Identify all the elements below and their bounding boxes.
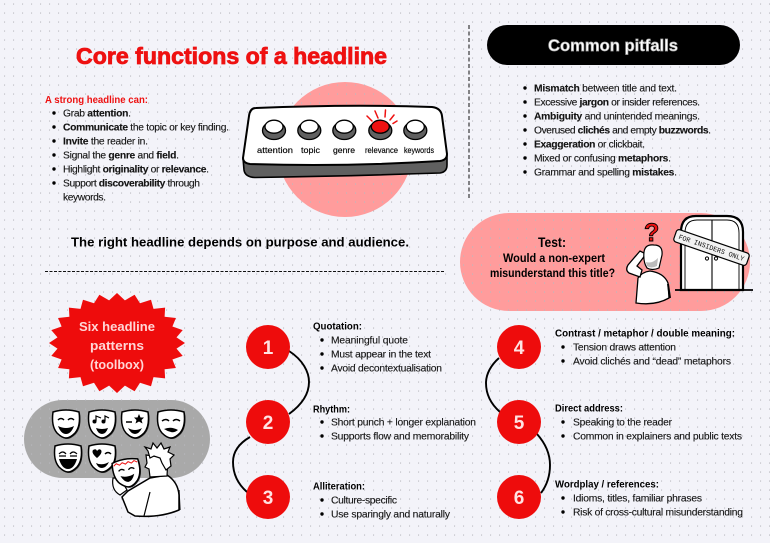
text block: pitfalls list: Excessive jargon or insider references. [534,98,700,108]
test panel background [460,213,750,311]
text block: pitfalls list [523,84,711,178]
pattern 3: alliteration: Use sparingly and naturally [331,510,451,520]
text block: pitfalls list: Mixed or confusing metaphors. [534,154,671,164]
icon: door [675,216,753,290]
pattern 3: alliteration [246,475,451,520]
button: topic: topic [301,145,321,155]
button: genre [333,120,356,155]
illustration: button panel [243,106,447,178]
pattern 2: rhythm [246,400,476,444]
pattern 6: wordplay: Wordplay / references: [555,480,659,490]
icon: held mask [111,457,144,490]
pattern 3: alliteration: Culture-specific [331,496,397,506]
icon: mask 2 notes [88,410,116,439]
pattern 5: direct address: Common in explainers and public texts [573,432,742,442]
icon: mask 5 [54,444,82,473]
callout: test question: Test: [538,235,566,250]
pattern 6: wordplay: Idioms, titles, familiar phrases [573,494,702,504]
connector 2 to 3 [233,437,250,492]
pattern 1: quotation: Must appear in the text [331,350,431,360]
pattern 4: contrast: Avoid clichés and “dead” metaphors [573,356,731,368]
heading: common pitfalls [487,25,740,65]
text block: a strong headline can [45,95,229,204]
pattern 5: direct address [497,400,742,444]
pattern 3: alliteration: Alliteration: [313,482,365,492]
pattern 1: quotation: Meaningful quote [331,336,408,346]
pink circle behind button panel [278,82,412,217]
badge: six headline patterns: (toolbox) [90,357,144,372]
icon: mask 4 [158,410,186,439]
pattern 6: wordplay: Risk of cross-cultural misunderstanding [573,508,743,518]
pattern 5: direct address: 5 [514,413,525,434]
statement: The right headline depends on purpose and audience. [71,234,409,250]
pattern 1: quotation: Quotation: [313,322,362,332]
pattern 1: quotation: Avoid decontextualisation [331,364,442,374]
connector 1 to 2 [289,351,309,414]
title: Core functions of a headline [76,43,387,69]
button: attention: attention [257,145,293,155]
text block: a strong headline can: Grab attention. [63,108,131,120]
badge: six headline patterns: patterns [90,338,144,353]
button: relevance (active) [365,110,398,155]
connector 5 to 6 [537,434,550,493]
text block: pitfalls list: Mismatch between title and text. [534,84,677,94]
connector 4 to 5 [486,358,500,412]
text block: a strong headline can: Communicate the topic or key finding. [63,122,229,134]
heading: common pitfalls: Common pitfalls [548,36,678,55]
text block: a strong headline can: Support discoverability through [63,178,200,190]
icon: mask 3 star [122,410,150,439]
illustration: person at door [627,216,753,304]
icon: thinking person [627,245,670,304]
pattern 4: contrast [497,325,735,369]
icon: mask 6 heart [88,444,116,473]
pattern 1: quotation [246,322,442,374]
pattern 6: wordplay [497,475,743,519]
text block: pitfalls list: Ambiguity and unintended meanings. [534,112,700,122]
text block: pitfalls list: Exaggeration or clickbait. [534,140,645,150]
icon: mask 1 [52,410,80,439]
callout: test question: misunderstand this title? [490,268,615,280]
text block: a strong headline can: A strong headline can: [45,95,148,106]
button: topic [298,120,321,155]
button: keywords [404,120,434,155]
pattern 2: rhythm: Short punch + longer explanation [331,418,476,428]
callout: test question [490,235,615,280]
illustration: man holding mask [111,443,180,516]
pattern 4: contrast: Contrast / metaphor / double meaning: [555,328,735,340]
button: genre: genre [333,145,355,155]
badge: six headline patterns [49,293,185,393]
button: relevance (active): relevance [365,145,398,155]
pattern 5: direct address: Speaking to the reader [573,418,673,428]
pattern 1: quotation: 1 [263,338,274,359]
pattern 6: wordplay: 6 [514,488,524,509]
pattern 2: rhythm: 2 [263,413,273,434]
banner: for insiders only: FOR INSIDERS ONLY [677,234,746,264]
pattern 2: rhythm: Supports flow and memorability [331,432,470,442]
pattern 3: alliteration: 3 [263,488,273,509]
text block: a strong headline can: Invite the reader in. [63,136,148,148]
illustration: masks [52,410,186,473]
badge: six headline patterns: Six headline [79,319,155,334]
pattern 2: rhythm: Rhythm: [313,404,350,416]
text block: a strong headline can: keywords. [63,192,106,204]
text block: pitfalls list: Overused clichés and empty buzzwords. [534,126,711,136]
text block: a strong headline can: Signal the genre and field. [63,150,179,162]
icon: question mark: ? [644,219,659,247]
text block: pitfalls list: Grammar and spelling mistakes. [534,168,677,178]
pattern 4: contrast: Tension draws attention [573,342,676,354]
pattern 5: direct address: Direct address: [555,404,623,414]
button: attention [257,120,293,155]
pattern 4: contrast: 4 [514,338,525,359]
button: keywords: keywords [404,145,434,155]
text block: a strong headline can: Highlight originality or relevance. [63,164,209,176]
callout: test question: Would a non-expert [503,253,605,265]
gray mask panel background [24,400,210,478]
